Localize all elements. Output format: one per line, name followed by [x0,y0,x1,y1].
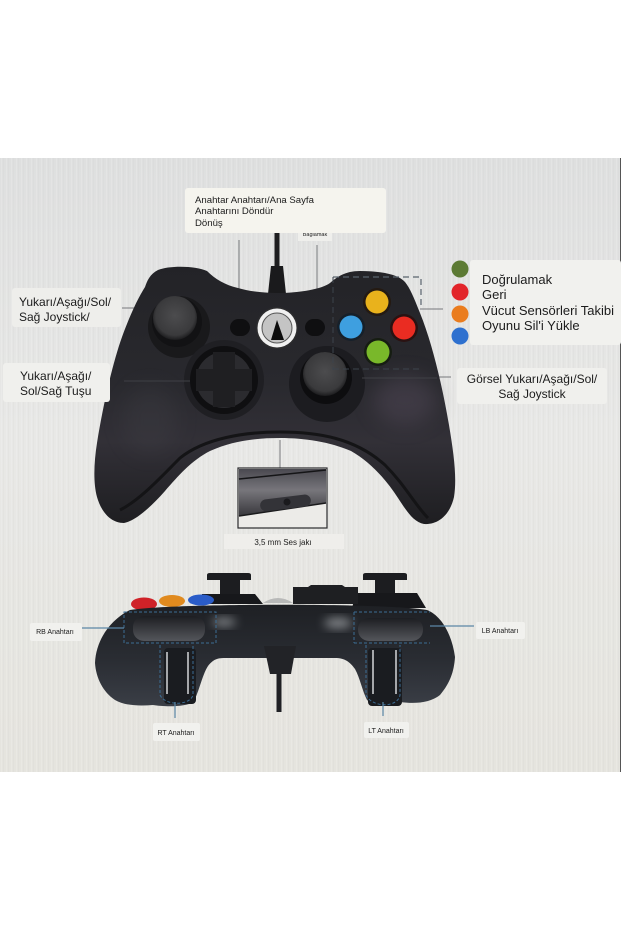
label: Anahtar Anahtarı/Ana Sayfa [185,188,386,233]
label: button legend: Oyunu Sil'i Yükle [482,318,580,333]
label: LB Anahtarı: LB Anahtarı [482,628,518,635]
label: 3,5 mm Ses jakı: 3,5 mm Ses jakı [254,538,312,547]
start button [305,319,325,336]
body sheen right [373,375,437,425]
label: Anahtar Anahtarı/Ana Sayfa: Dönüş [195,218,223,229]
label: LB Anahtarı [476,622,525,639]
legend dot: blue [452,328,468,344]
label: button legend: Doğrulamak [482,272,553,287]
body sheen left [122,386,178,454]
rear stick left [207,573,251,595]
label: RB Anahtarı: RB Anahtarı [36,629,74,636]
label: button legend [470,260,621,345]
back button [230,319,250,336]
controller body [94,267,455,524]
small hidden label: Bağlamak: Bağlamak [303,232,327,238]
rear cable [276,665,282,712]
label: LT Anahtarı: LT Anahtarı [368,728,404,735]
rear body [95,605,455,706]
dashed highlight [333,277,421,306]
button X [337,313,365,341]
rear button red [131,598,157,610]
callout: audio jack photo [238,468,327,528]
RB bumper [133,616,205,641]
photo background panel [0,158,621,772]
label: right joystick: Görsel Yukarı/Aşağı/Sol/ [467,372,598,386]
rear button orange [159,595,185,607]
label: right joystick [457,368,607,404]
legend dot: orange [452,306,468,322]
label: LT Anahtarı [364,722,409,738]
right joystick [289,346,365,422]
legend dot: green [452,260,468,278]
label: d-pad: Yukarı/Aşağı/ [20,369,92,383]
rear d-pad [293,585,358,604]
rear stick base right [352,593,426,608]
label: right joystick: Sağ Joystick [498,387,567,401]
left joystick [148,296,210,358]
label: Anahtar Anahtarı/Ana Sayfa: Anahtarını Döndür [195,206,274,217]
rear highlight right [324,618,352,628]
button B [390,314,418,342]
label: 3,5 mm Ses jakı [224,534,344,549]
label: d-pad: Sol/Sağ Tuşu [20,384,91,398]
rear stick base left [200,594,263,604]
label: RT Anahtarı: RT Anahtarı [157,730,195,737]
rear guide dome [263,598,293,603]
rear highlight left [212,618,236,626]
d-pad [184,340,264,420]
rear cable boot [264,646,296,674]
leader lines [122,240,451,468]
label: button legend: Geri [482,287,507,302]
rear controller [95,573,455,712]
LT trigger [368,648,402,706]
top controller [94,267,455,524]
guide lines over body [124,378,437,381]
rear leader lines [82,626,474,718]
label: d-pad [3,363,110,402]
label: RB Anahtarı [30,623,82,641]
rear stick right [363,573,407,595]
body lower rim [120,432,428,518]
label: Anahtar Anahtarı/Ana Sayfa: Anahtar Anahtarı/Ana Sayfa [195,195,315,206]
rear button blue [188,594,214,606]
cable strain relief [268,266,286,294]
legend dot: red [452,284,468,300]
label: button legend: Vücut Sensörleri Takibi [482,303,614,318]
guide button [256,307,298,349]
LB bumper [358,618,423,641]
RT trigger [164,648,196,704]
label: left joystick: Sağ Joystick/ [19,310,90,324]
small hidden label: Bağlamak [298,226,332,241]
trigger ridges [166,650,397,694]
label: left joystick: Yukarı/Aşağı/Sol/ [19,295,112,309]
button A [364,338,392,366]
cable: top controller [274,232,280,268]
button Y [363,288,391,316]
dashed rear highlights [124,612,430,705]
label: RT Anahtarı [153,723,200,741]
label: left joystick [12,288,121,327]
